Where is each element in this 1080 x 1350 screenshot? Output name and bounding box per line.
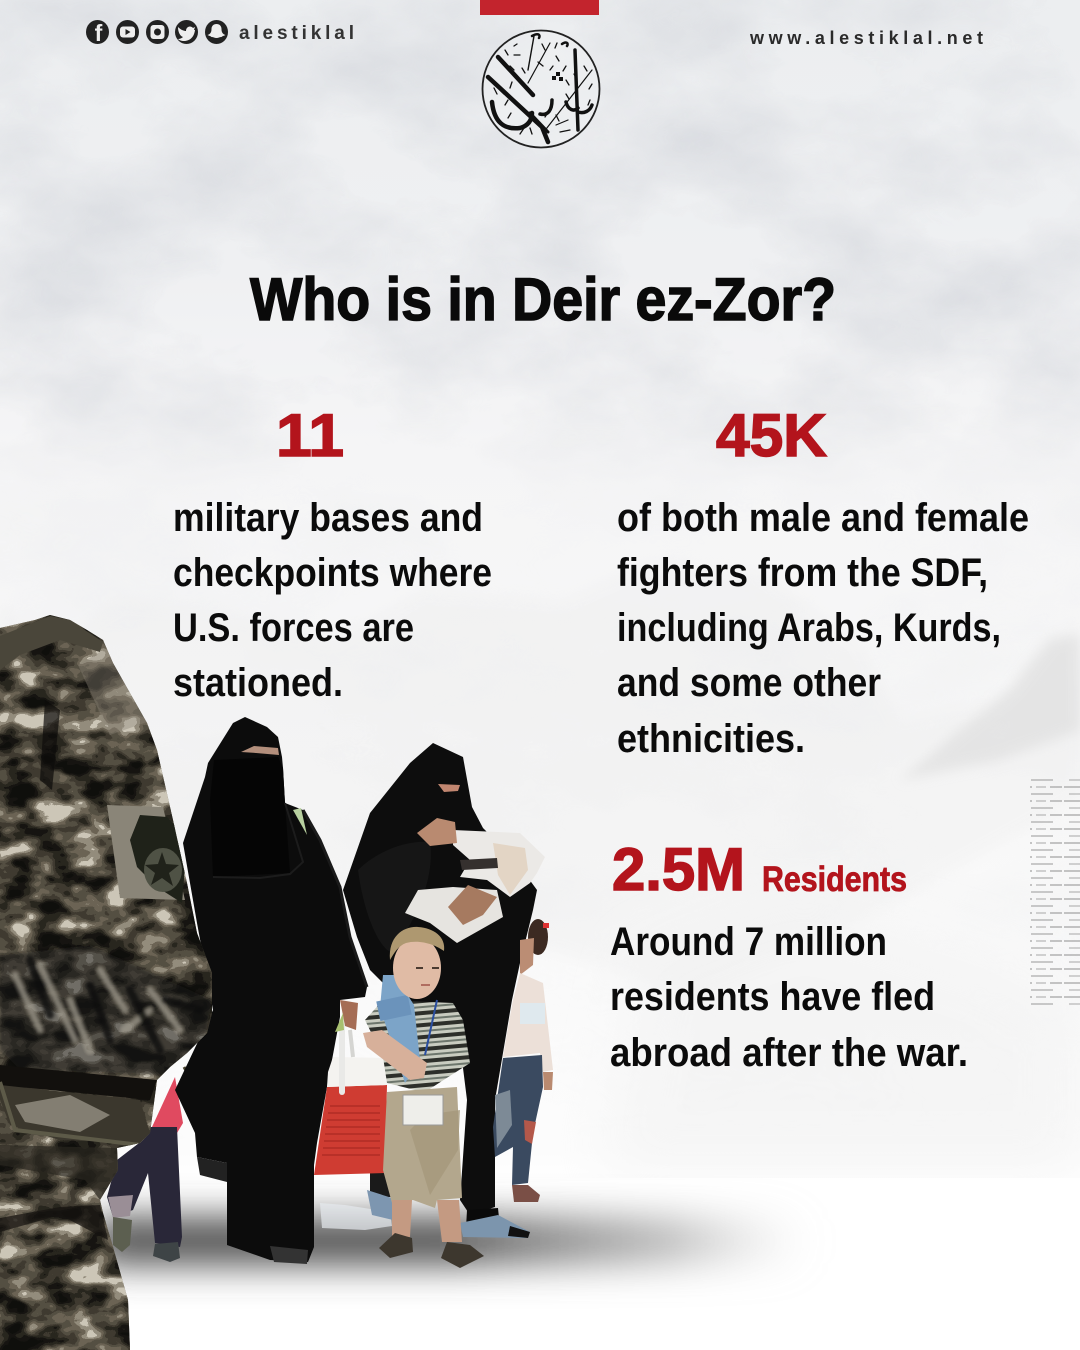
photo: civilians group xyxy=(107,717,553,1268)
text: residents fled xyxy=(610,920,968,1075)
red cooler xyxy=(314,1000,387,1175)
ground shadow xyxy=(90,1218,810,1264)
social media icons: f xyxy=(95,20,103,46)
uniform patch xyxy=(107,805,185,900)
red top tab xyxy=(480,0,599,15)
plastic bottle on ground xyxy=(320,1203,392,1230)
child at right xyxy=(493,919,553,1202)
shield badge with star xyxy=(130,815,185,903)
website URL: www.alestiklal.net xyxy=(749,28,983,48)
logo: round calligraphic seal xyxy=(482,30,600,148)
text: residents fled: residents have fled xyxy=(610,975,935,1019)
newspaper fragment at right edge xyxy=(1030,775,1080,1005)
belt and pouch xyxy=(0,1065,157,1145)
stat: 11: 11 xyxy=(276,402,344,469)
woman right in niqab xyxy=(343,743,537,1238)
text: SDF fighters xyxy=(617,496,1029,761)
text: military bases: checkpoints where xyxy=(173,551,492,595)
text: military bases xyxy=(173,496,492,705)
boy with water bottle xyxy=(363,927,484,1268)
baby in white cloth xyxy=(405,818,545,943)
text: SDF fighters: including Arabs, Kurds, xyxy=(617,606,1001,650)
shoulder webbing strap xyxy=(0,616,103,670)
stat: 2.5M Residents: 2.5M xyxy=(612,836,745,903)
dark body shadow xyxy=(40,700,60,790)
trousers shadow xyxy=(0,1145,118,1200)
stat: 45K: 45K xyxy=(716,402,827,469)
shoulder epaulette xyxy=(78,640,147,735)
stat: 2.5M Residents: Residents xyxy=(762,860,907,899)
text: residents fled: abroad after the war. xyxy=(610,1031,968,1075)
text: SDF fighters: ethnicities. xyxy=(617,717,805,761)
social media icons xyxy=(86,20,228,46)
forearm folds xyxy=(0,945,212,1075)
title: Who is in Deir ez-Zor? xyxy=(250,266,836,333)
text: military bases: stationed. xyxy=(173,661,343,705)
text: residents fled: Around 7 million xyxy=(610,920,887,964)
photo: soldier in camouflage xyxy=(0,600,220,1350)
brand name: alestiklal xyxy=(239,23,354,44)
text: military bases: U.S. forces are xyxy=(173,606,414,650)
woman left in niqab xyxy=(175,717,367,1264)
text: SDF fighters: fighters from the SDF, xyxy=(617,551,988,595)
text: SDF fighters: and some other xyxy=(617,661,881,705)
text: SDF fighters: of both male and female xyxy=(617,496,1029,540)
child at back left xyxy=(107,1067,206,1262)
text: military bases: military bases and xyxy=(173,496,483,540)
stat: 2.5M Residents xyxy=(612,836,907,903)
